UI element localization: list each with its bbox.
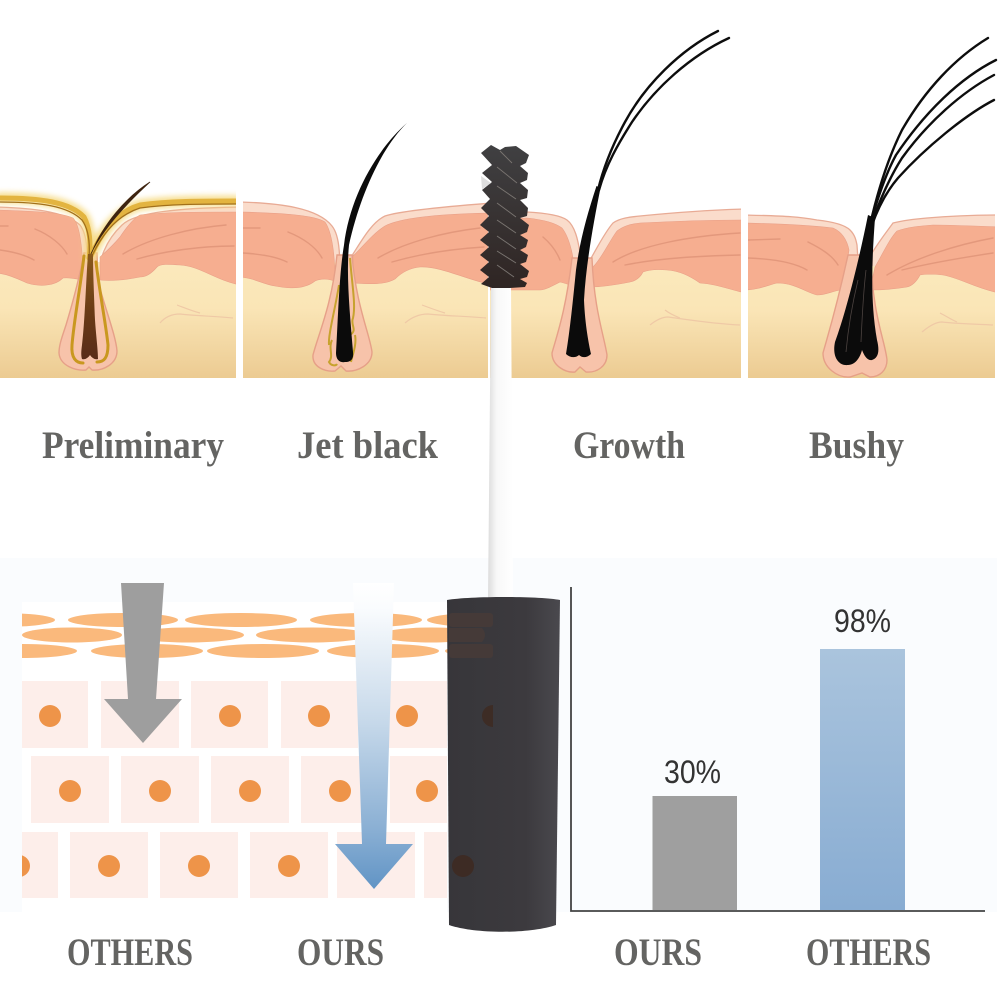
follicle (552, 258, 607, 372)
fat layer ellipses (22, 613, 448, 658)
skin cells row 3 (8, 832, 447, 898)
gold sheath (329, 258, 355, 365)
heading: Bushy: Bushy (809, 424, 904, 467)
follicle (59, 253, 117, 370)
value: 30%: 30% (664, 754, 721, 790)
label: OURS right: OURS (614, 931, 702, 974)
follicle (313, 255, 372, 371)
hair strands (870, 38, 988, 225)
panel: hair stage Preliminary (0, 182, 240, 378)
axes (571, 587, 985, 911)
hair strands (598, 31, 718, 190)
bar: others 98% (820, 649, 905, 910)
panel: hair stage Jet black (239, 123, 492, 378)
hair brown (81, 182, 150, 359)
hair (336, 123, 407, 362)
heading: Growth: Growth (573, 424, 685, 467)
skin cells row 2 (31, 756, 447, 823)
value: 98%: 98% (834, 603, 891, 639)
panel: skin absorption diagram (22, 613, 448, 898)
wand shaft (488, 285, 513, 602)
bar chart (571, 587, 985, 911)
gold sebum bands (0, 198, 236, 363)
arrow: others grey (104, 583, 182, 743)
product: mascara tube (447, 597, 560, 932)
fat layer seen through tube (449, 613, 493, 658)
label: OURS left: OURS (297, 931, 384, 974)
dark nucleus seen through tube (482, 705, 493, 727)
brush head (480, 145, 529, 288)
follicle (823, 255, 887, 377)
heading: Preliminary: Preliminary (42, 424, 224, 467)
panel: lower background (0, 558, 997, 912)
panel: hair stage Bushy (744, 38, 999, 378)
heading: Jet black: Jet black (297, 424, 438, 467)
label: OTHERS left: OTHERS (67, 931, 193, 974)
panel: hair stage Growth (486, 31, 745, 378)
label: OTHERS right: OTHERS (806, 931, 931, 974)
bar: ours 30% (652, 796, 737, 910)
product: mascara wand (480, 145, 529, 602)
arrow: ours blue gradient (335, 583, 413, 889)
skin cells row 1 (22, 681, 447, 748)
